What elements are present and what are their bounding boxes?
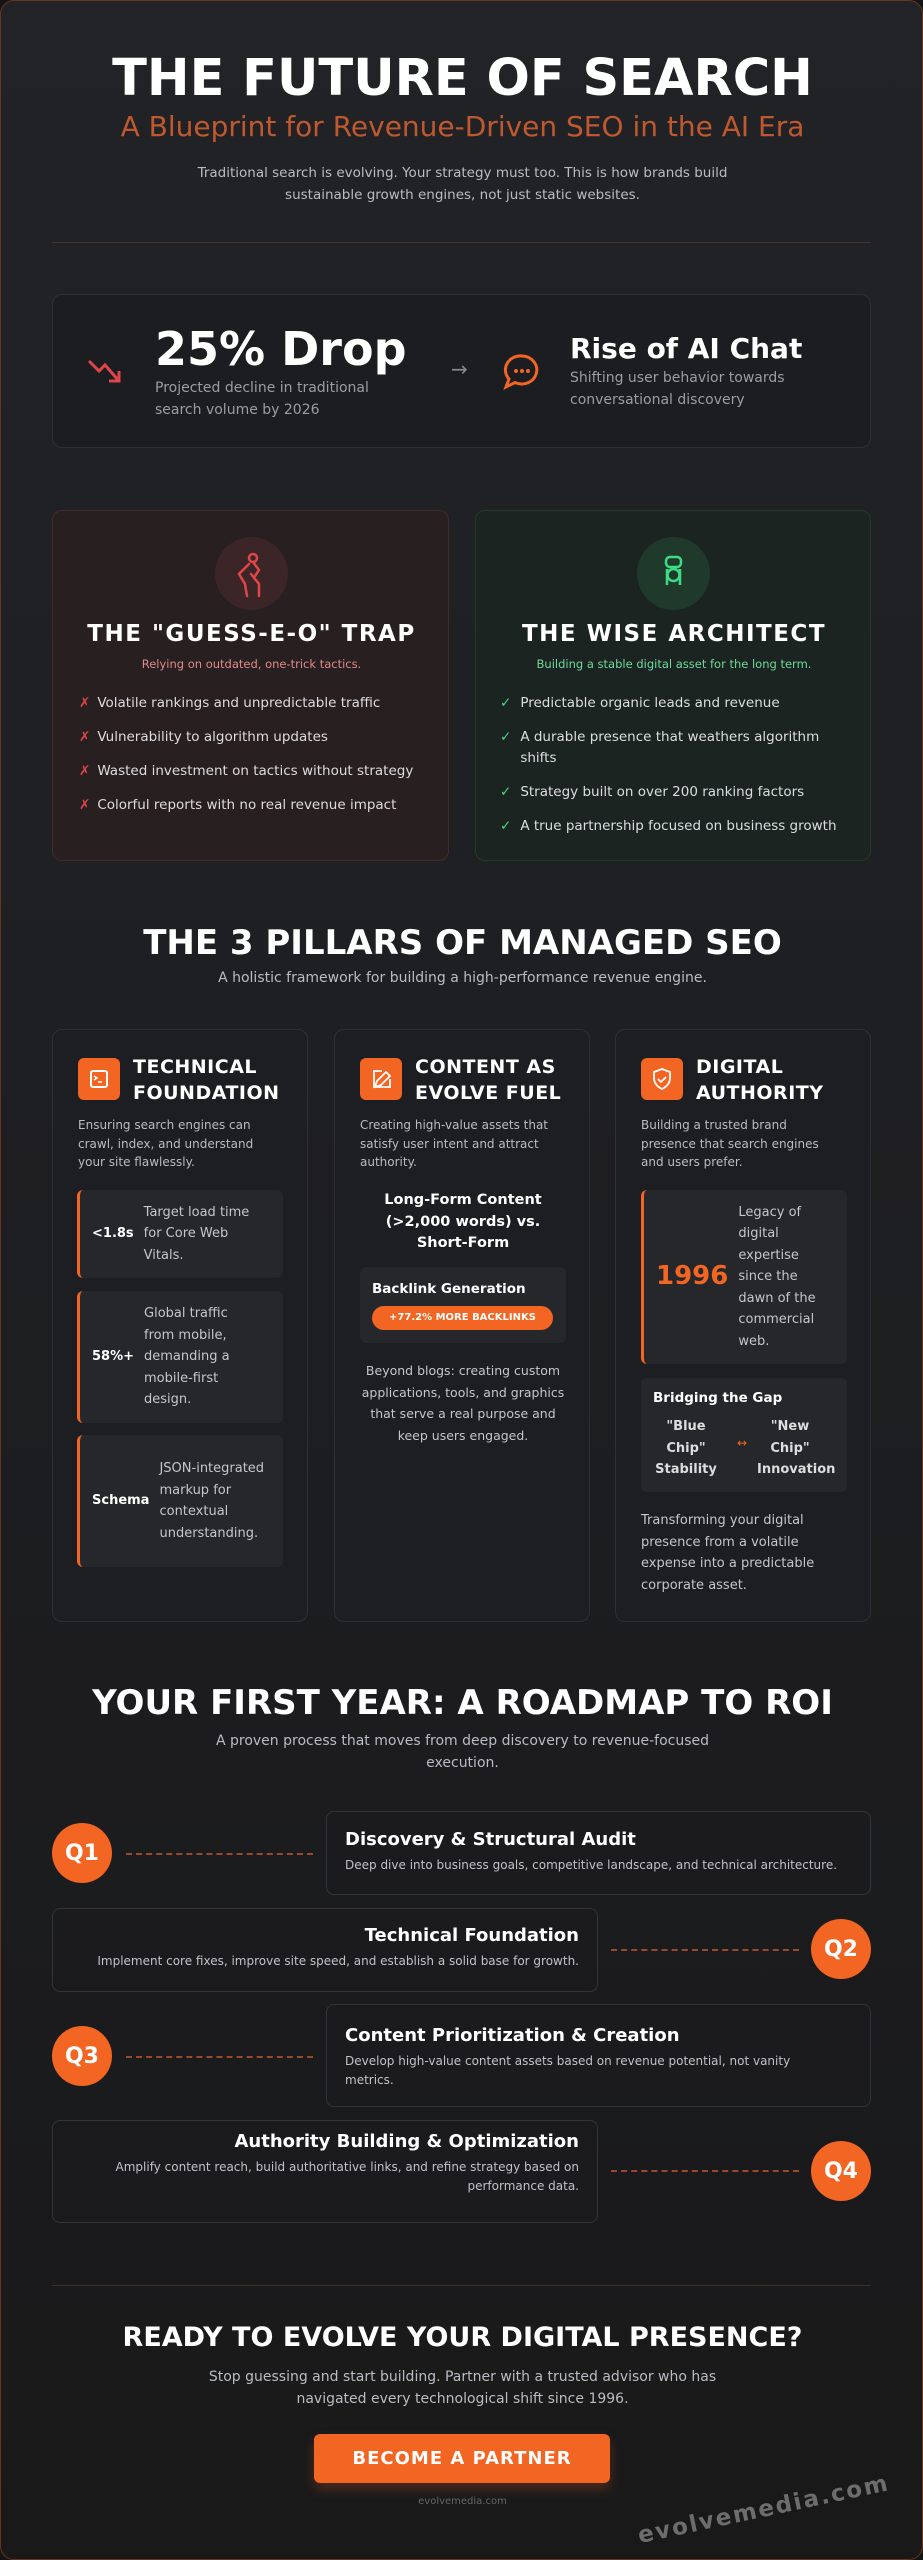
list: positives: Predictable organic leads and revenue	[520, 695, 780, 711]
roadmap: Q3	[52, 2004, 871, 2107]
stat: load time: <1.8s	[92, 1226, 134, 1241]
list: negatives: ✗ Colorful reports with no real revenue impact	[79, 797, 396, 813]
watermark: evolvemedia.com	[636, 2470, 892, 2549]
stat: 1996: Legacy of digital expertise since the dawn of the commercial web.	[738, 1205, 816, 1349]
title: THE FUTURE OF SEARCH	[112, 49, 813, 108]
intro text: Traditional search is evolving. Your strategy must too. This is how brands build sustainable growth engines, not just static websites.	[198, 165, 727, 203]
CTA heading: READY TO EVOLVE YOUR DIGITAL PRESENCE?	[123, 2322, 802, 2353]
icon: architect	[637, 537, 710, 610]
list: positives: A true partnership focused on business growth	[520, 818, 837, 834]
panel: guess-e-o trap	[52, 510, 449, 861]
bridging box	[641, 1378, 847, 1492]
pillar: content	[334, 1029, 590, 1622]
roadmap: Q2: Implement core fixes, improve site speed, and establish a solid base for growth.	[97, 1954, 579, 1968]
stat: mobile: 58%+	[92, 1349, 134, 1364]
stat: 1996: 1996	[656, 1261, 728, 1291]
stat: schema	[77, 1435, 283, 1567]
roadmap: Q4: Authority Building & Optimization	[234, 2131, 579, 2152]
bridging box: Bridging the Gap	[653, 1390, 782, 1406]
bridging box: "Blue Chip" Stability	[655, 1419, 717, 1477]
pill: +77.2% MORE BACKLINKS	[389, 1312, 536, 1323]
stat: rise of AI chat: Shifting user behavior towards conversational discovery	[570, 370, 785, 408]
button: BECOME A PARTNER	[352, 2448, 572, 2469]
roadmap: Q3: Develop high-value content assets based on revenue potential, not vanity metrics.	[345, 2054, 790, 2087]
list: positives: ✓	[500, 818, 511, 834]
backlink box: Backlink Generation	[372, 1281, 526, 1297]
stat: load time	[77, 1190, 283, 1278]
pillar: technical foundation: Ensuring search engines can crawl, index, and understand your site flawlessly.	[78, 1118, 253, 1169]
button	[314, 2434, 610, 2483]
list: negatives: ✗ Volatile rankings and unpredictable traffic	[79, 695, 380, 711]
stat: 25% drop: 25% Drop	[155, 322, 407, 376]
heading: roadmap: YOUR FIRST YEAR: A ROADMAP TO ROI	[92, 1683, 833, 1723]
footer url: evolvemedia.com	[418, 2496, 507, 2507]
stat: 25% drop: Projected decline in traditional search volume by 2026	[155, 380, 369, 418]
stat: rise of AI chat: Rise of AI Chat	[570, 332, 802, 365]
roadmap: Q1: Discovery & Structural Audit	[345, 1829, 636, 1850]
roadmap: Q3: Q3	[65, 2044, 99, 2068]
roadmap: Q1: Deep dive into business goals, competitive landscape, and technical architecture.	[345, 1858, 837, 1872]
roadmap: Q1	[52, 1811, 871, 1895]
pillar: technical foundation	[52, 1029, 308, 1622]
bridging box: "New Chip" Innovation	[757, 1419, 835, 1477]
roadmap: Q3: Content Prioritization & Creation	[345, 2025, 680, 2046]
roadmap: Q1: Q1	[65, 1840, 99, 1866]
list: positives	[500, 695, 837, 834]
stat: mobile: Global traffic from mobile, demanding a mobile-first design.	[144, 1306, 230, 1407]
icon: shield	[641, 1058, 683, 1100]
roadmap: Q4: Q4	[824, 2158, 858, 2184]
pillar: authority: Building a trusted brand presence that search engines and users prefer.	[641, 1118, 819, 1169]
pillar: content: CONTENT AS	[415, 1056, 556, 1078]
pillar: authority: AUTHORITY	[696, 1082, 823, 1104]
text: long-form: Long-Form Content (>2,000 words) vs. Short-Form	[384, 1192, 542, 1251]
stat: rise of AI chat	[570, 332, 802, 408]
heading: THE "GUESS-E-O" TRAP	[87, 621, 416, 647]
panel: wise architect: Building a stable digital asset for the long term.	[537, 657, 811, 671]
pillar: authority: Transforming your digital presence from a volatile expense into a predictable corporate asset.	[641, 1513, 814, 1593]
list: negatives: ✗ Vulnerability to algorithm updates	[79, 729, 328, 745]
list: positives: ✓	[500, 784, 511, 800]
list: negatives: ✗ Wasted investment on tactics without strategy	[79, 763, 413, 779]
pillar: content: Beyond blogs: creating custom applications, tools, and graphics that serve a real purpose and keep users engaged.	[362, 1363, 564, 1443]
stat: 25% drop	[155, 322, 407, 418]
text: A holistic framework for building a high-performance revenue engine.	[218, 970, 707, 986]
icon: trending down	[88, 360, 120, 382]
list: positives: ✓	[500, 729, 511, 745]
roadmap: Q2: Technical Foundation	[365, 1925, 579, 1946]
roadmap: Q2	[52, 1908, 871, 1992]
stat: load time: Target load time for Core Web Vitals.	[144, 1205, 249, 1263]
text: Stop guessing and start building. Partner with a trusted advisor who has navigated every technological shift since 1996.	[209, 2369, 716, 2407]
panel: guess-e-o trap: Relying on outdated, one-trick tactics.	[142, 657, 361, 671]
pillar: content: EVOLVE FUEL	[415, 1082, 561, 1104]
icon: pencil	[360, 1058, 402, 1100]
icon: terminal	[78, 1058, 120, 1100]
stat banner	[52, 294, 871, 448]
pillar: authority	[615, 1029, 871, 1622]
list: positives: A durable presence that weathers algorithm shifts	[520, 729, 819, 766]
list: positives: Strategy built on over 200 ranking factors	[520, 784, 804, 800]
stat: schema: JSON-integrated markup for contextual understanding.	[159, 1461, 264, 1540]
text: A proven process that moves from deep discovery to revenue-focused execution.	[216, 1733, 709, 1771]
pillar: content: Creating high-value assets that satisfy user intent and attract authority.	[360, 1118, 548, 1169]
pillar: authority: DIGITAL	[696, 1056, 783, 1078]
subtitle: A Blueprint for Revenue-Driven SEO in the AI Era	[121, 110, 804, 143]
bridging box: ↔	[737, 1436, 747, 1450]
panel: wise architect	[475, 510, 871, 861]
stat: mobile	[77, 1291, 283, 1423]
backlink box	[360, 1267, 566, 1343]
arrow: →	[451, 357, 468, 381]
icon: stumbling figure	[215, 537, 288, 610]
pillar: technical foundation: TECHNICAL	[133, 1056, 257, 1078]
heading: THE WISE ARCHITECT	[522, 621, 826, 647]
heading: pillars: THE 3 PILLARS OF MANAGED SEO	[143, 923, 782, 963]
list: positives: ✓	[500, 695, 511, 711]
roadmap: Q2: Q2	[824, 1936, 858, 1962]
icon: chat	[503, 354, 538, 390]
stat: 1996	[641, 1190, 847, 1364]
list: negatives	[79, 695, 413, 813]
roadmap: Q4	[52, 2120, 871, 2223]
pill	[372, 1306, 553, 1330]
stat: schema: Schema	[92, 1493, 149, 1508]
roadmap: Q4: Amplify content reach, build authoritative links, and refine strategy based on performance data.	[116, 2160, 579, 2193]
pillar: technical foundation: FOUNDATION	[133, 1082, 280, 1104]
